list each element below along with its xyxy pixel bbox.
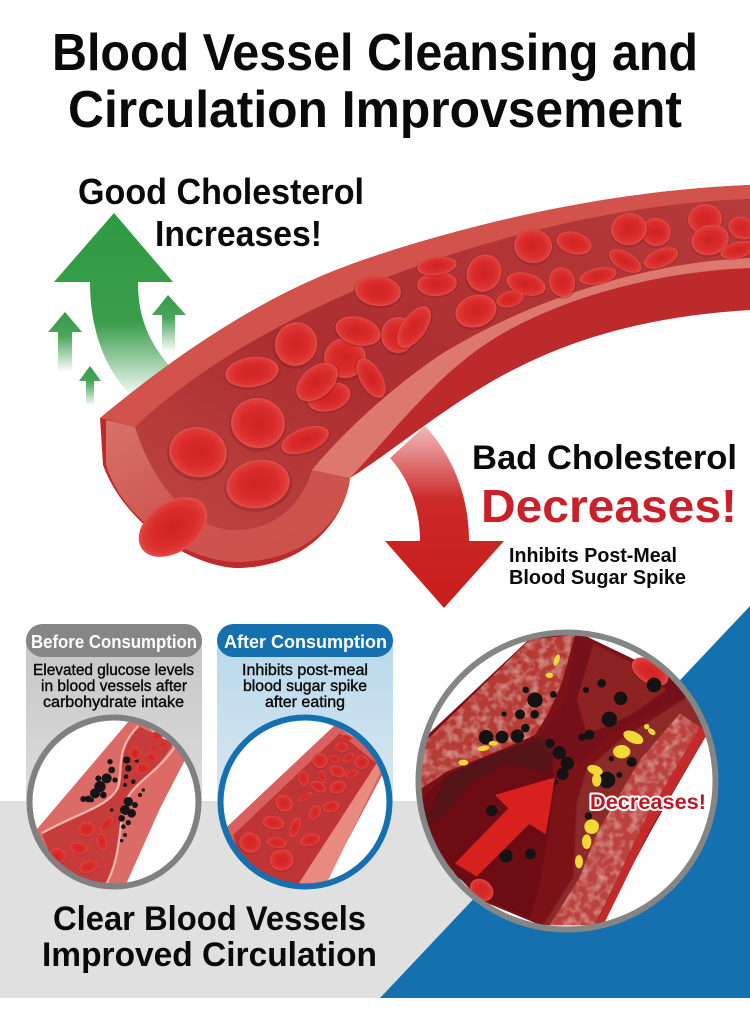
arrow: small green low <box>79 366 101 406</box>
panel background <box>26 640 202 801</box>
panel description <box>242 662 368 711</box>
heading: bad cholesterol: Bad Cholesterol <box>472 439 737 477</box>
title: Blood Vessel Cleansing and <box>52 24 698 82</box>
arrow: large red down <box>385 426 504 608</box>
panel: after consumption <box>217 624 393 887</box>
panel description: Elevated glucose levels <box>33 662 194 679</box>
pill heading <box>217 624 393 657</box>
heading: bad cholesterol <box>472 439 737 532</box>
dark lumen upper <box>540 637 687 763</box>
footer statement: Clear Blood Vessels <box>53 900 366 938</box>
heading: good cholesterol <box>78 171 364 254</box>
heading: bad cholesterol: Decreases! <box>481 480 737 532</box>
panel background <box>217 640 393 801</box>
vessel lower wall surface <box>312 258 750 478</box>
plaque lower wall <box>543 697 708 925</box>
illustration: main blood vessel <box>100 185 750 569</box>
plaque upper wall <box>417 635 575 792</box>
arrow: large green up <box>54 213 175 396</box>
panel description: blood sugar spike <box>243 678 367 695</box>
black deposits <box>479 679 637 863</box>
title <box>52 24 698 139</box>
arrow: small green left <box>48 312 82 372</box>
red arrow <box>455 777 555 877</box>
red blood cells <box>163 202 750 518</box>
dark lumen lower <box>422 756 555 918</box>
panel description: carbohydrate intake <box>43 694 184 711</box>
footer statement: Improved Circulation <box>42 936 377 974</box>
vessel outer body <box>100 185 750 568</box>
text: inhibits post-meal spike: Inhibits Post-Meal <box>509 545 677 567</box>
circle: clear vessel <box>220 718 390 887</box>
escaping red blood cell <box>128 485 218 569</box>
label: decreases: Decreases! <box>590 791 706 814</box>
yellow deposits <box>458 653 657 868</box>
icon: green arrows <box>48 213 186 406</box>
panel: before consumption <box>26 624 202 887</box>
panel description: Inhibits post-meal <box>242 662 368 679</box>
escaping cells <box>468 878 494 902</box>
arrow: small green right <box>152 295 186 352</box>
text: inhibits post-meal spike <box>509 545 686 589</box>
panel description: in blood vessels after <box>41 678 188 695</box>
vessel lumen <box>135 199 750 530</box>
background: blue diagonal <box>380 606 750 998</box>
artery base <box>413 632 708 925</box>
text: inhibits post-meal spike: Blood Sugar Spike <box>509 567 686 589</box>
circle: blocked vessel <box>30 718 198 887</box>
panel description: after eating <box>265 694 345 711</box>
heading: good cholesterol: Good Cholesterol <box>78 171 364 212</box>
vessel cut face <box>106 420 350 562</box>
pill heading <box>26 624 202 657</box>
heading: good cholesterol: Increases! <box>155 213 322 254</box>
panel description <box>33 662 194 711</box>
background: gray band <box>0 801 750 998</box>
title: Circulation Improvsement <box>68 81 682 139</box>
pill label: After Consumption <box>224 632 387 652</box>
vessel upper wall <box>100 185 750 427</box>
footer statement <box>42 900 377 974</box>
panel: enlarged blocked artery <box>413 632 716 930</box>
pill label: Before Consumption <box>31 632 197 652</box>
